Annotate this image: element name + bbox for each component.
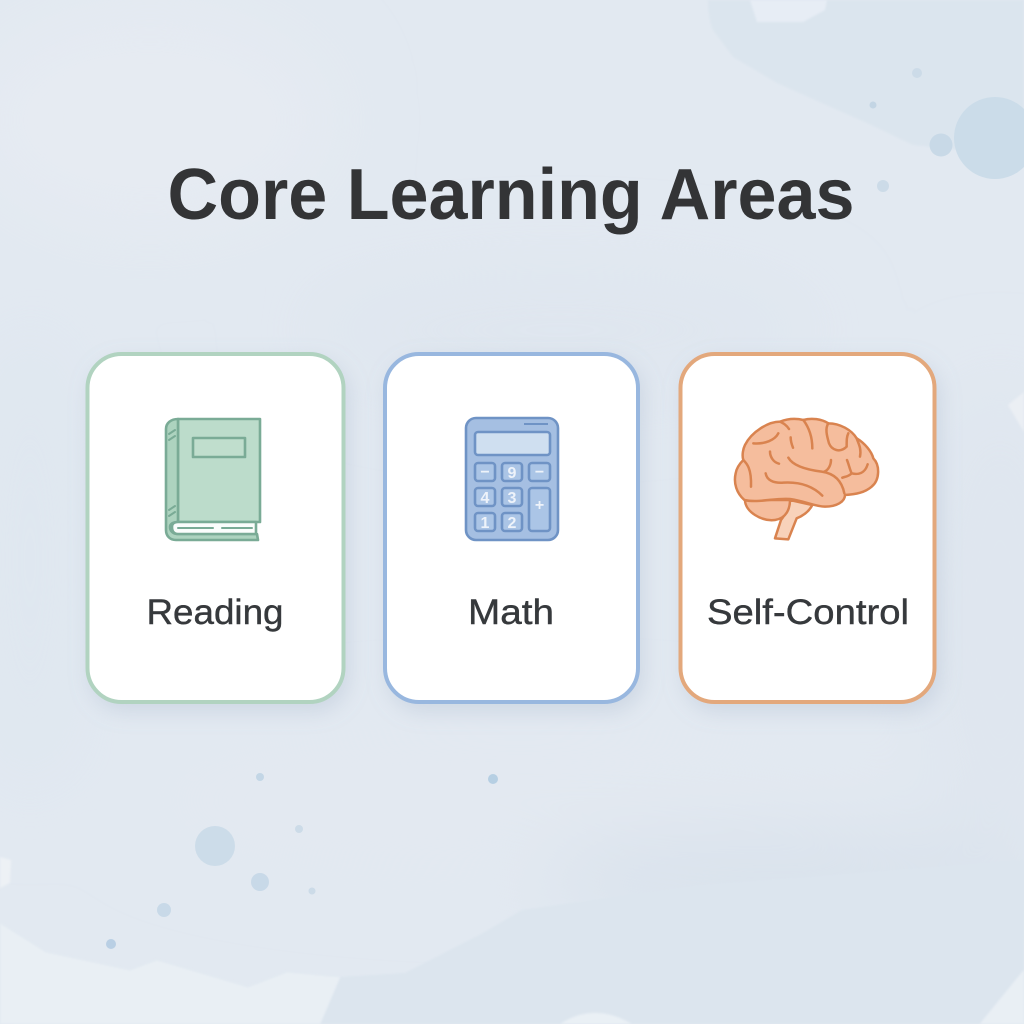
icon: calculator: 9 xyxy=(508,465,517,482)
title: Core Learning Areas xyxy=(168,155,854,235)
icon: calculator: + xyxy=(535,497,544,514)
panel: self-control xyxy=(680,354,934,702)
panel: reading xyxy=(88,354,344,702)
icon: calculator: 4 xyxy=(481,490,490,507)
label: reading: Reading xyxy=(146,593,284,632)
label: math: Math xyxy=(468,593,554,632)
icon: book xyxy=(166,419,260,540)
icon: calculator: − xyxy=(535,464,544,481)
icon: calculator xyxy=(466,418,558,540)
icon: calculator: − xyxy=(480,464,490,481)
icon: calculator: 2 xyxy=(508,515,517,532)
icon: brain xyxy=(735,419,878,539)
panel: math xyxy=(385,354,638,702)
icon: calculator: 3 xyxy=(508,490,517,507)
icon: calculator: 1 xyxy=(481,515,490,532)
label: self-control: Self-Control xyxy=(707,593,909,632)
